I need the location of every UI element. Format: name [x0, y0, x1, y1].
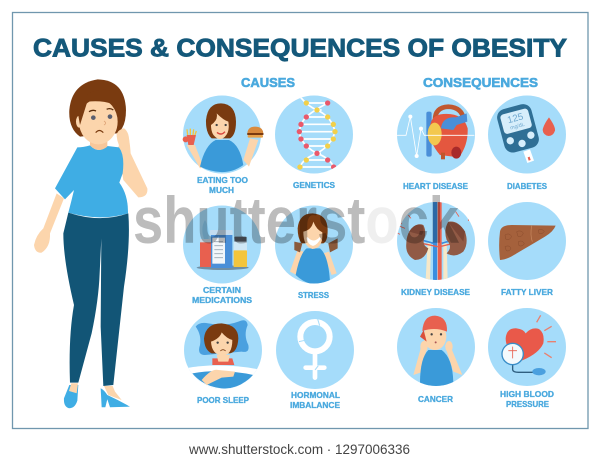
icon: diabetes meter: mg/dL — [510, 122, 526, 132]
label: high blood pressure: PRESSURE — [506, 399, 549, 409]
label: kidney disease: KIDNEY DISEASE — [401, 287, 470, 297]
icon: heart disease — [397, 96, 475, 174]
label: certain medications: MEDICATIONS — [192, 295, 252, 305]
label: diabetes: DIABETES — [507, 181, 547, 191]
icon: stress — [275, 206, 353, 285]
label: certain medications — [192, 285, 252, 305]
title: CAUSES & CONSEQUENCES OF OBESITY — [33, 34, 567, 62]
icon: hormonal imbalance — [276, 311, 354, 389]
label: stress: STRESS — [298, 290, 329, 300]
heading: consequences: CONSEQUENCES — [423, 75, 538, 90]
watermark: shutterstock — [133, 183, 459, 257]
icon: genetics DNA — [275, 96, 353, 174]
woman figure — [34, 79, 147, 408]
label: eating too much: MUCH — [209, 185, 234, 195]
label: genetics: GENETICS — [293, 180, 335, 190]
icon: diabetes meter: 125 — [506, 111, 525, 126]
heading: causes: CAUSES — [241, 75, 295, 90]
icon: kidney disease — [395, 200, 475, 280]
icon: diabetes meter — [488, 96, 566, 174]
icon: certain medications — [183, 206, 261, 284]
label: heart disease: HEART DISEASE — [403, 181, 468, 191]
icon: poor sleep — [184, 311, 262, 395]
icon: fatty liver — [488, 202, 566, 280]
label: hormonal imbalance — [290, 390, 340, 410]
label: hormonal imbalance: HORMONAL — [291, 390, 340, 400]
icon: high blood pressure — [488, 308, 566, 386]
label: eating too much — [197, 175, 249, 195]
label: high blood pressure: HIGH BLOOD — [500, 389, 554, 399]
icon: eating too much — [183, 96, 264, 174]
label: cancer: CANCER — [418, 394, 453, 404]
label: certain medications: CERTAIN — [203, 285, 241, 295]
icon: cancer — [397, 308, 475, 387]
footer credit: www.shutterstock.com · 1297006336 — [188, 442, 410, 457]
label: high blood pressure — [500, 389, 554, 409]
label: poor sleep: POOR SLEEP — [197, 395, 249, 405]
label: hormonal imbalance: IMBALANCE — [290, 400, 340, 410]
label: eating too much: EATING TOO — [197, 175, 249, 185]
label: fatty liver: FATTY LIVER — [501, 287, 553, 297]
